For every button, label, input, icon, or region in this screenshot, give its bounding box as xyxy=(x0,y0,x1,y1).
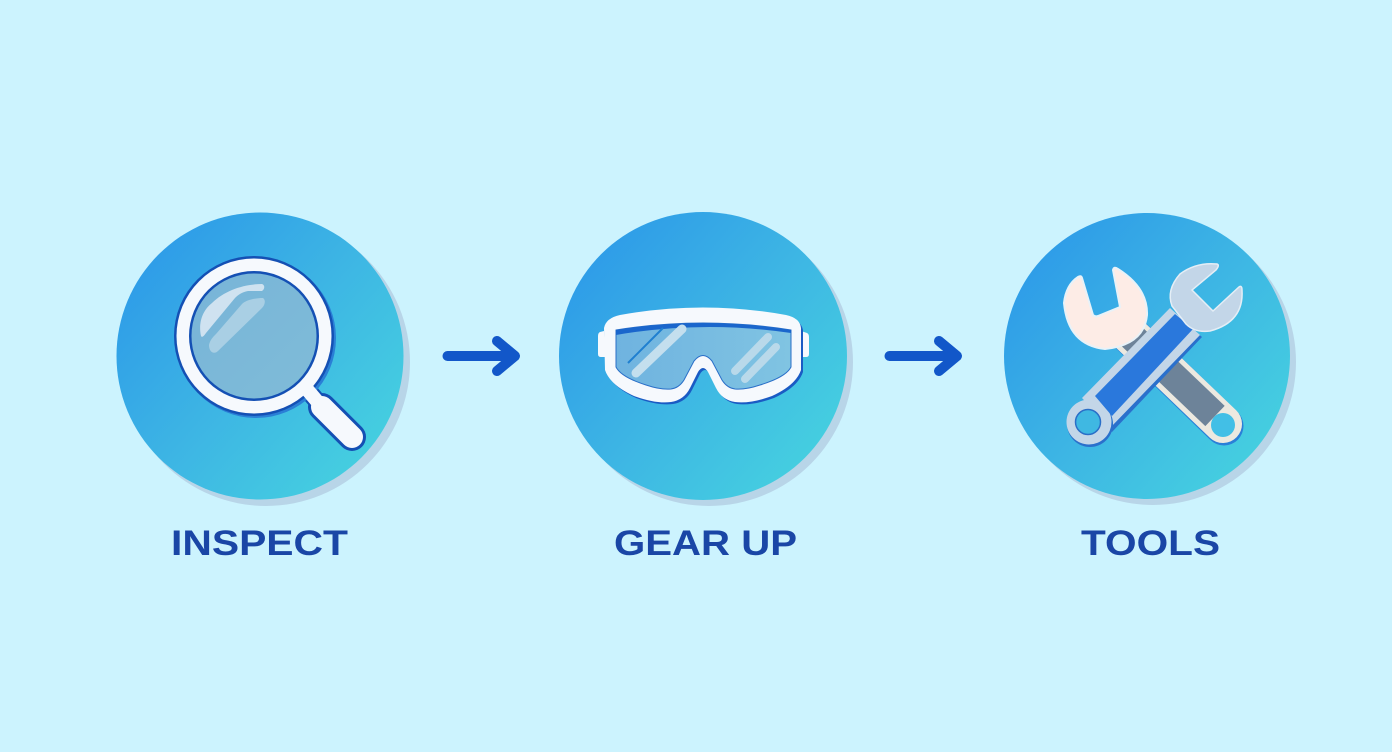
icon: safety goggles xyxy=(598,308,809,404)
circle: tools xyxy=(1004,213,1290,499)
step 2: gear up xyxy=(559,212,853,563)
label: gear up: GEAR UP xyxy=(614,524,797,563)
wrench: blue xyxy=(1066,264,1242,447)
label: tools: TOOLS xyxy=(1081,524,1220,563)
label: inspect: INSPECT xyxy=(171,524,348,563)
step 3: tools xyxy=(1004,213,1296,563)
wrench: pink and grey xyxy=(1064,268,1235,437)
circle shadow: inspect xyxy=(122,218,410,506)
icon: magnifying glass xyxy=(174,256,352,437)
step 1: inspect xyxy=(116,212,410,563)
circle shadow: tools xyxy=(1010,219,1296,505)
arrow: inspect to gear up xyxy=(448,341,515,371)
circle: gear up xyxy=(559,212,847,500)
arrow: gear up to tools xyxy=(890,341,957,371)
icon: crossed wrenches xyxy=(1064,264,1242,447)
circle: inspect xyxy=(116,212,404,500)
circle shadow: gear up xyxy=(565,218,853,506)
